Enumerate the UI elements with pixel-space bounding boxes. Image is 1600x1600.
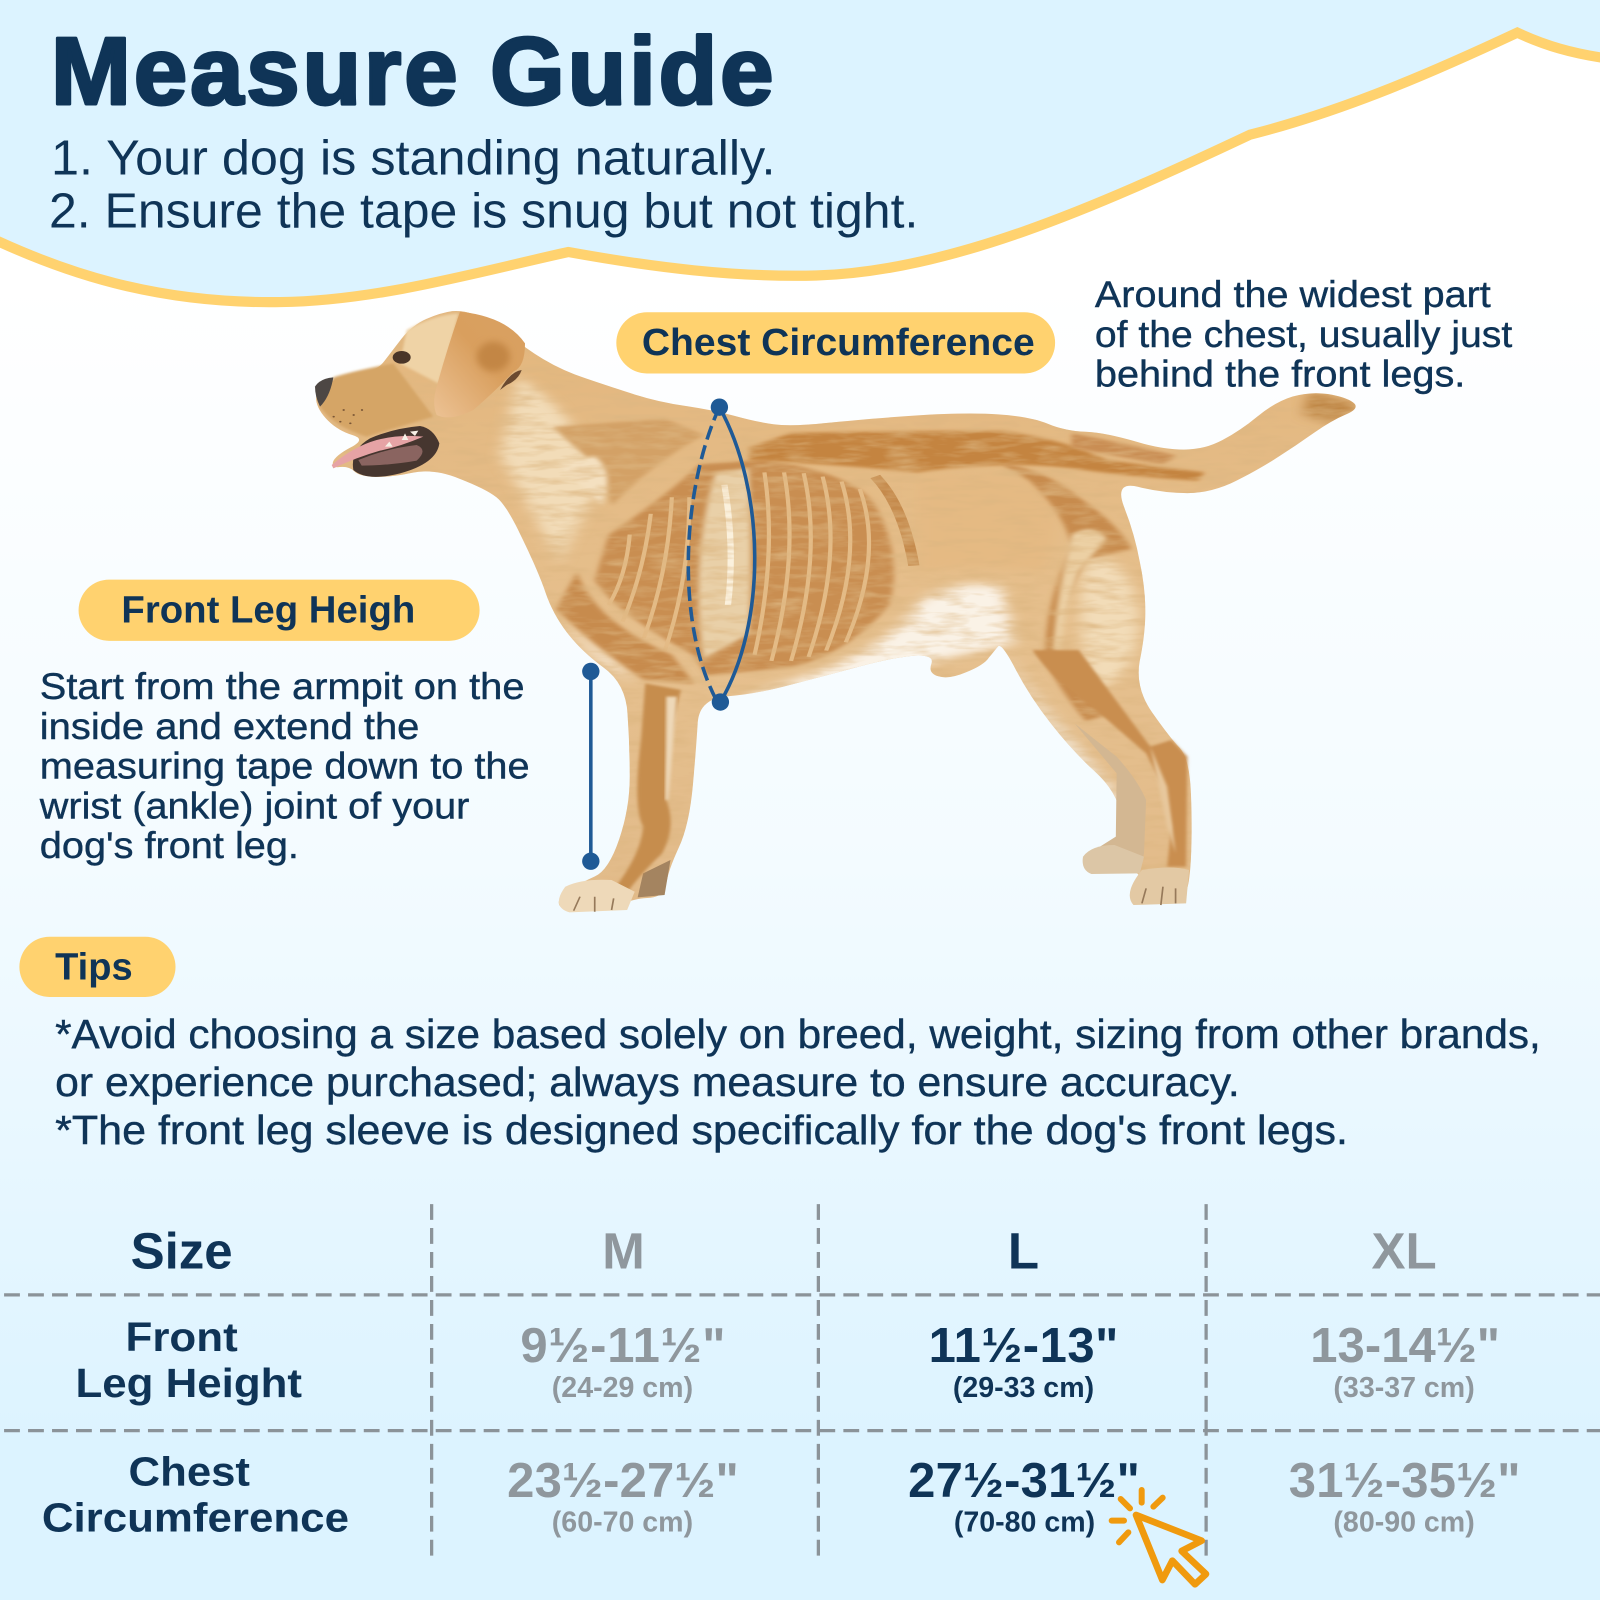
row: front leg height: Leg Height (76, 1360, 302, 1406)
header row: XL (1371, 1222, 1437, 1279)
lower lip (358, 445, 423, 466)
row: chest circumference: (70-80 cm) (954, 1507, 1095, 1539)
front paw (559, 880, 635, 912)
upper shoulder bones (553, 418, 703, 506)
instructions: 1. Your dog is standing naturally. (51, 131, 776, 185)
row: front leg height: 9½-11½" (520, 1319, 726, 1373)
far hind leg (1075, 723, 1146, 873)
dog illustration with anatomy overlay (300, 290, 1373, 916)
ear (434, 312, 525, 417)
front leg description: dog's front leg. (40, 825, 299, 866)
chest circumference tape (688, 398, 755, 711)
label: front leg height: Front Leg Heigh (121, 588, 415, 630)
teeth (385, 431, 418, 447)
front leg description: inside and extend the (40, 706, 419, 747)
header wave band (0, 0, 1600, 302)
scapula pale gap (698, 468, 751, 659)
front leg bones (616, 683, 681, 893)
eye (393, 351, 411, 364)
muzzle shading (320, 363, 433, 437)
row: chest circumference: 27½-31½" (908, 1454, 1140, 1508)
header row (131, 1222, 1437, 1279)
row: front leg height (76, 1314, 1500, 1406)
far front leg (638, 860, 670, 897)
front leg description (39, 666, 530, 866)
header row: M (602, 1222, 645, 1279)
floating rib (875, 477, 914, 566)
row: front leg height: (29-33 cm) (953, 1372, 1094, 1404)
row: chest circumference: (80-90 cm) (1333, 1507, 1475, 1539)
instructions: 2. Ensure the tape is snug but not tight. (49, 185, 918, 239)
row: front leg height: Front (126, 1314, 238, 1360)
size table (4, 1204, 1600, 1556)
whisker dots (333, 410, 362, 423)
rib stripes (609, 472, 869, 661)
row: chest circumference: (60-70 cm) (552, 1507, 693, 1539)
row: chest circumference: 23½-27½" (507, 1454, 739, 1508)
chest description (1095, 274, 1512, 395)
mouth (353, 426, 439, 477)
header row: L (1008, 1222, 1039, 1279)
nose (315, 377, 333, 407)
rib cage (595, 460, 894, 675)
chest description: Around the widest part (1095, 274, 1491, 315)
row: chest circumference: Chest (129, 1449, 250, 1495)
front paw toes (574, 897, 614, 912)
fur texture (300, 290, 1373, 916)
title: Measure Guide (51, 18, 773, 125)
chest description: of the chest, usually just (1095, 314, 1512, 355)
soft cream fur areas (500, 377, 1138, 841)
row: front leg height: 13-14½" (1310, 1319, 1500, 1373)
header row: Size (131, 1222, 233, 1279)
instructions (49, 131, 918, 239)
row: chest circumference (42, 1449, 1520, 1541)
tips text: *The front leg sleeve is designed specifically for the dog's front legs. (55, 1107, 1348, 1153)
shoulder bones (556, 572, 694, 684)
chest description: behind the front legs. (1095, 354, 1465, 395)
label: front leg height (79, 580, 480, 641)
row: chest circumference: Circumference (42, 1495, 349, 1541)
table grid (4, 1204, 1600, 1556)
pelvis and upper rear leg bones (1002, 464, 1131, 721)
row: front leg height: (33-37 cm) (1333, 1372, 1475, 1404)
label: chest circumference: Chest Circumference (642, 321, 1035, 363)
tips text (55, 1011, 1541, 1153)
row: front leg height: (24-29 cm) (552, 1372, 693, 1404)
tongue (332, 436, 423, 468)
ear dark patch (477, 342, 510, 372)
tips text: *Avoid choosing a size based solely on breed, weight, sizing from other brands, (55, 1011, 1541, 1057)
front leg description: wrist (ankle) joint of your (39, 785, 469, 826)
front leg height tape (582, 663, 599, 870)
dog head details (315, 312, 525, 477)
dog body (300, 290, 1373, 916)
tips text: or experience purchased; always measure to ensure accuracy. (55, 1059, 1240, 1105)
row: chest circumference: 31½-35½" (1289, 1454, 1520, 1508)
label: tips (19, 937, 176, 997)
near hind toes (1142, 887, 1176, 905)
front leg description: measuring tape down to the (40, 746, 530, 787)
forehead (400, 313, 458, 383)
label: tips: Tips (55, 946, 133, 988)
front leg description: Start from the armpit on the (40, 666, 524, 707)
label: chest circumference (616, 312, 1055, 373)
ear fold (500, 370, 522, 390)
near hind paw (1130, 868, 1189, 905)
far hind paw (1083, 845, 1144, 874)
near hind bones (1032, 650, 1187, 867)
row: front leg height: 11½-13" (929, 1319, 1118, 1373)
dog legs and paws (559, 650, 1189, 912)
icon: click cursor (1112, 1490, 1206, 1584)
spine and tail band (749, 431, 1205, 481)
